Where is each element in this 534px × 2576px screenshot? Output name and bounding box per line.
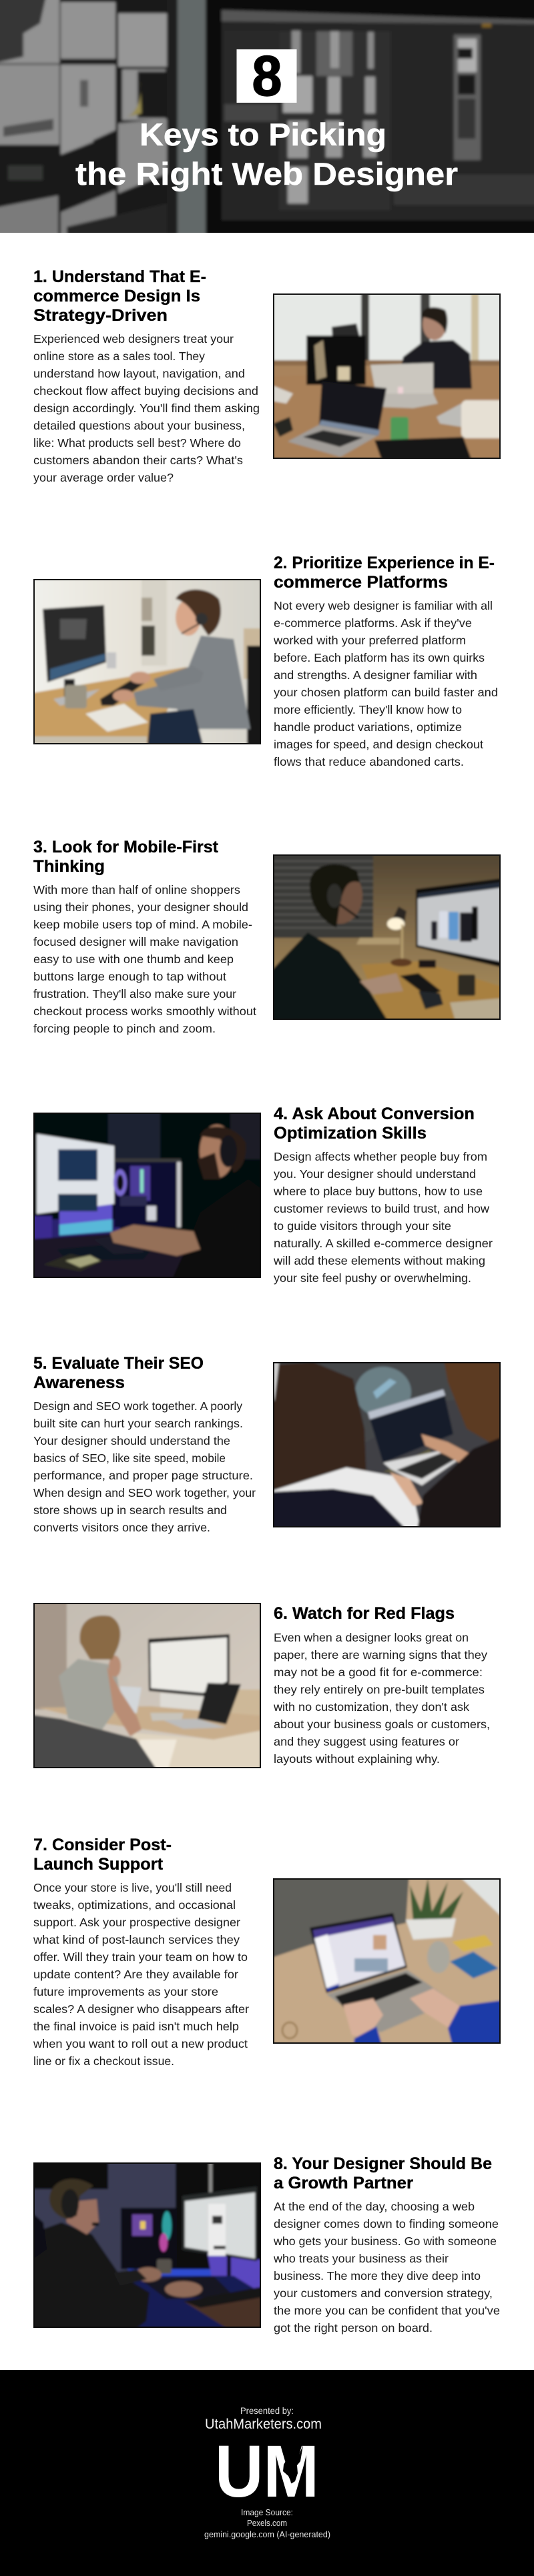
body text 2: before. Each platform has its own quirks — [274, 651, 485, 664]
photo 4: man with headphones and RGB PC — [28, 1107, 266, 1283]
body text 3: using their phones, your designer should — [33, 900, 248, 914]
heading 5: Awareness — [33, 1373, 125, 1392]
photo 3: man at night desk with lamp — [268, 849, 506, 1025]
photo 2: man with headset at desk — [28, 574, 266, 750]
body text 6: and they suggest using features or — [274, 1735, 459, 1748]
body text 1: detailed questions about your business, — [33, 419, 245, 432]
section 7 — [33, 1836, 506, 2068]
body text 4: where to place buy buttons, how to use — [273, 1185, 483, 1198]
body text 3: focused designer will make navigation — [33, 935, 238, 948]
body text 5: When design and SEO work together, your — [33, 1486, 256, 1499]
body text 1: checkout flow affect buying decisions and — [33, 384, 258, 398]
section 2 — [28, 554, 498, 768]
section 3 — [33, 838, 506, 1035]
body text 8: who gets your business. Go with someone — [273, 2234, 497, 2248]
body text 1: design accordingly. You'll find them asking — [33, 402, 260, 415]
body text 6: layouts without explaining why. — [274, 1752, 440, 1766]
presented by: Presented by: — [240, 2405, 294, 2416]
heading 5 — [33, 1354, 204, 1392]
body text 3: With more than half of online shoppers — [33, 883, 240, 896]
body text 7: the final invoice is paid isn't much help — [33, 2020, 239, 2033]
body text 5: converts visitors once they arrive. — [33, 1521, 210, 1534]
body text 3: easy to use with one thumb and keep — [33, 952, 234, 966]
section 5 — [33, 1354, 506, 1534]
body text 2: and strengths. A designer familiar with — [274, 668, 477, 682]
body text 1: customers abandon their carts? What's — [33, 454, 243, 467]
body text 3: checkout process works smoothly without — [33, 1005, 256, 1018]
heading 3 — [33, 838, 219, 876]
heading 7: Launch Support — [33, 1855, 164, 1874]
heading 4: 4. Ask About Conversion — [274, 1105, 475, 1123]
body text 2: e-commerce platforms. Ask if they've — [274, 616, 472, 630]
body text 4: your site feel pushy or overwhelming. — [274, 1271, 471, 1285]
heading 1: 1. Understand That E- — [33, 267, 206, 286]
body text 4: you. Your designer should understand — [274, 1167, 476, 1181]
body text 2: worked with your preferred platform — [273, 634, 466, 647]
body text 1 — [33, 332, 260, 484]
body text 6: Even when a designer looks great on — [274, 1631, 469, 1644]
body text 2: flows that reduce abandoned carts. — [274, 755, 464, 768]
number badge — [236, 45, 296, 108]
header banner — [0, 0, 534, 239]
number badge: 8 — [252, 45, 282, 108]
body text 7: what kind of post-launch services they — [33, 1933, 240, 1946]
heading 2 — [274, 554, 495, 592]
heading 3: 3. Look for Mobile-First — [33, 838, 219, 856]
body text 6: about your business goals or customers, — [274, 1718, 490, 1731]
title: the Right Web Designer — [75, 156, 458, 191]
photo 1: designer at office table — [268, 288, 506, 464]
body text 3: forcing people to pinch and zoom. — [33, 1022, 216, 1035]
body text 7: offer. Will they train your team on how to — [33, 1950, 248, 1964]
image sources: Image Source: — [241, 2507, 293, 2517]
body text 4: Design affects whether people buy from — [274, 1150, 487, 1163]
body text 7: tweaks, optimizations, and occasional — [33, 1898, 236, 1912]
heading 8: 8. Your Designer Should Be — [274, 2154, 492, 2173]
body text 8: got the right person on board. — [274, 2321, 433, 2335]
body text 4: naturally. A skilled e-commerce designer — [274, 1237, 493, 1250]
body text 5 — [33, 1399, 256, 1534]
body text 4: customer reviews to build trust, and how — [274, 1202, 489, 1215]
heading 1: Strategy-Driven — [33, 306, 168, 325]
body text 8: your customers and conversion strategy, — [274, 2287, 493, 2300]
body text 3 — [33, 883, 256, 1035]
body text 6: may not be a good fit for e-commerce: — [274, 1666, 483, 1679]
heading 5: 5. Evaluate Their SEO — [33, 1354, 204, 1373]
body text 4: to guide visitors through your site — [274, 1219, 451, 1233]
heading 1: commerce Design Is — [33, 287, 200, 305]
body text 8: business. The more they dive deep into — [274, 2269, 481, 2283]
title — [75, 117, 458, 191]
body text 1: Experienced web designers treat your — [33, 332, 234, 346]
body text 8 — [273, 2200, 500, 2335]
photo 6: man thinking at desk — [28, 1597, 266, 1774]
body text 1: understand how layout, navigation, and — [33, 367, 245, 380]
body text 8: who treats your business as their — [273, 2252, 449, 2265]
body text 6: paper, there are warning signs that they — [274, 1648, 487, 1662]
body text 7: when you want to roll out a new product — [33, 2037, 248, 2050]
body text 5: basics of SEO, like site speed, mobile — [33, 1451, 226, 1465]
presented by: UtahMarketers.com — [205, 2417, 322, 2432]
heading 1 — [33, 267, 206, 325]
body text 5: Your designer should understand the — [33, 1434, 230, 1447]
photo 5: two women at a laptop — [268, 1357, 506, 1533]
image sources: Pexels.com — [247, 2518, 287, 2528]
photo 8: man with headset and curved monitor — [28, 2157, 266, 2333]
body text 5: built site can hurt your search rankings. — [33, 1417, 243, 1430]
body text 3: keep mobile users top of mind. A mobile- — [33, 918, 252, 931]
body text 7 — [33, 1881, 249, 2068]
header background photo: blurred monitors — [0, 0, 534, 233]
section 6 — [28, 1597, 490, 1774]
section 8 — [28, 2154, 500, 2335]
body text 3: frustration. They'll also make sure your — [33, 987, 236, 1001]
body text 5: performance, and proper page structure. — [33, 1469, 253, 1482]
heading 7 — [33, 1836, 172, 1874]
photo 7: laptop on wooden table — [268, 1873, 506, 2049]
body text 2: images for speed, and design checkout — [274, 738, 483, 751]
logo: UM with mountain: UM — [215, 2431, 319, 2513]
heading 2: 2. Prioritize Experience in E- — [274, 554, 495, 572]
body text 4 — [273, 1150, 493, 1285]
body text 1: online store as a sales tool. They — [33, 350, 205, 363]
heading 4 — [274, 1105, 475, 1143]
presented by — [205, 2405, 322, 2432]
heading 8 — [274, 2154, 492, 2192]
heading 7: 7. Consider Post- — [33, 1836, 172, 1854]
body text 5: store shows up in search results and — [33, 1503, 227, 1517]
body text 6 — [273, 1631, 490, 1766]
image sources — [204, 2507, 330, 2539]
section 1 — [33, 267, 506, 484]
body text 6: they rely entirely on pre-built templates — [274, 1683, 485, 1696]
body text 7: future improvements as your store — [33, 1985, 218, 1998]
body text 1: your average order value? — [33, 471, 174, 484]
body text 2: more efficiently. They'll know how to — [274, 703, 462, 716]
body text 7: line or fix a checkout issue. — [33, 2054, 174, 2068]
heading 6: 6. Watch for Red Flags — [274, 1604, 455, 1623]
body text 2: your chosen platform can build faster and — [274, 686, 498, 699]
title: Keys to Picking — [140, 117, 386, 152]
footer — [0, 2370, 534, 2576]
body text 7: support. Ask your prospective designer — [33, 1916, 240, 1929]
section 4 — [28, 1105, 493, 1285]
body text 8: the more you can be confident that you've — [274, 2304, 500, 2317]
body text 5: Design and SEO work together. A poorly — [33, 1399, 242, 1413]
body text 3: buttons large enough to tap without — [33, 970, 226, 983]
body text 2: Not every web designer is familiar with all — [274, 599, 493, 612]
body text 2: handle product variations, optimize — [274, 720, 462, 734]
body text 2 — [273, 599, 498, 768]
body text 8: designer comes down to finding someone — [274, 2217, 499, 2230]
body text 4: will add these elements without making — [273, 1254, 485, 1267]
heading 3: Thinking — [33, 857, 105, 876]
heading 2: commerce Platforms — [274, 573, 448, 592]
body text 7: update content? Are they available for — [33, 1968, 238, 1981]
body text 7: scales? A designer who disappears after — [33, 2002, 249, 2016]
body text 7: Once your store is live, you'll still need — [33, 1881, 232, 1894]
heading 8: a Growth Partner — [274, 2174, 413, 2192]
heading 4: Optimization Skills — [274, 1124, 427, 1143]
image sources: gemini.google.com (AI-generated) — [204, 2529, 330, 2539]
body text 1: like: What products sell best? Where do — [33, 436, 241, 450]
body text 8: At the end of the day, choosing a web — [274, 2200, 475, 2213]
body text 6: with no customization, they don't ask — [273, 1700, 469, 1714]
